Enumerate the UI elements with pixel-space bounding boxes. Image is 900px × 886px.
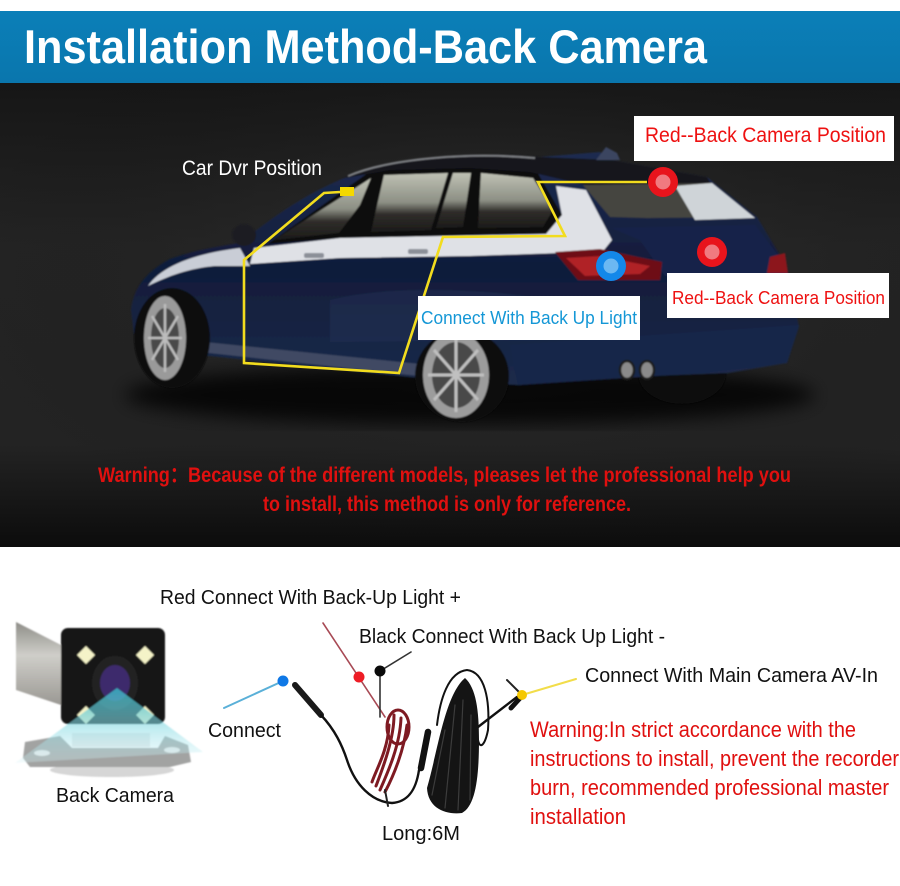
black cable coil <box>427 670 488 813</box>
left tail light <box>555 249 662 280</box>
warning text: parts: installation <box>530 804 626 829</box>
yellow wiring route <box>244 182 647 373</box>
LEDs <box>77 646 154 724</box>
label: connect with back up light <box>418 296 640 340</box>
rear wheel <box>415 330 509 422</box>
door shine <box>330 290 555 342</box>
white reflection side <box>250 186 612 264</box>
rear window <box>583 183 752 218</box>
inline module <box>421 732 428 768</box>
red black coil <box>372 710 409 806</box>
label: Black Connect: Black Connect With Back Up Light - <box>359 626 665 648</box>
main black wire <box>321 697 517 803</box>
front fender reflection <box>148 248 250 286</box>
lower bumper <box>510 325 799 385</box>
shadow <box>50 763 174 777</box>
camera photo <box>15 622 203 777</box>
mounting bracket <box>23 736 191 767</box>
blue connect pointer <box>224 676 288 708</box>
window: rear quarter <box>478 173 553 228</box>
warning text: car panel: Warning：Because of the different models, pleases let the professional help you <box>98 464 791 487</box>
label: Connect: Connect <box>208 720 281 742</box>
greenhouse frame <box>268 164 562 244</box>
cyan light beam <box>15 688 203 763</box>
label: top camera position: Red--Back Camera Position <box>645 124 886 147</box>
window: front door <box>274 178 371 240</box>
label: lower camera position: Red--Back Camera Position <box>672 288 885 308</box>
door handles <box>304 249 428 258</box>
window: middle <box>371 173 448 232</box>
label: Car Dvr Position: Car Dvr Position <box>182 157 322 180</box>
label: Main Camera AV-In: Connect With Main Camera AV-In <box>585 665 878 687</box>
rocker <box>200 342 420 376</box>
antenna <box>596 147 620 160</box>
panel: wiring parts <box>15 587 899 845</box>
exhaust pipes <box>620 361 654 379</box>
connector plug <box>295 685 321 715</box>
label: Long 6M: Long:6M <box>382 823 460 845</box>
metal strip <box>16 622 61 705</box>
label: lower camera position <box>667 273 889 318</box>
red dot <box>354 672 364 682</box>
warning text: car panel: to install, this method is only for reference. <box>263 493 631 516</box>
cable assembly <box>224 623 576 813</box>
label: top camera position <box>634 116 894 161</box>
roof <box>345 154 712 186</box>
marker: blue back up light <box>596 251 626 281</box>
yellow av plug pointer <box>507 679 576 708</box>
header band <box>0 11 900 83</box>
right tail light <box>767 253 788 273</box>
rear hatch <box>612 225 790 290</box>
label: connect with back up light: Connect With Back Up Light <box>421 308 637 328</box>
far rear wheel <box>638 344 726 404</box>
marker: red rear spoiler <box>648 167 678 197</box>
car body <box>131 152 799 385</box>
marker: red hatch <box>697 237 727 267</box>
warning text: car panel <box>98 464 791 516</box>
window: small <box>436 173 471 228</box>
red wire <box>323 623 385 717</box>
black lead <box>380 652 411 717</box>
camera body <box>61 628 165 724</box>
illustration: blue estate car <box>125 147 815 425</box>
warning text: parts: Warning:In strict accordance with the <box>530 717 856 742</box>
label: Back Camera: Back Camera <box>56 785 175 807</box>
panel: car installation diagram <box>0 83 900 547</box>
title: Installation Method-Back Camera <box>24 20 708 73</box>
bracket holes <box>34 733 180 756</box>
black dot <box>374 666 386 676</box>
label: Red Connect: Red Connect With Back-Up Light + <box>160 587 461 609</box>
mirror <box>232 224 256 246</box>
front wheel <box>134 288 210 388</box>
warning text: parts <box>530 717 899 829</box>
lens <box>92 656 138 710</box>
roof rail <box>348 156 535 176</box>
